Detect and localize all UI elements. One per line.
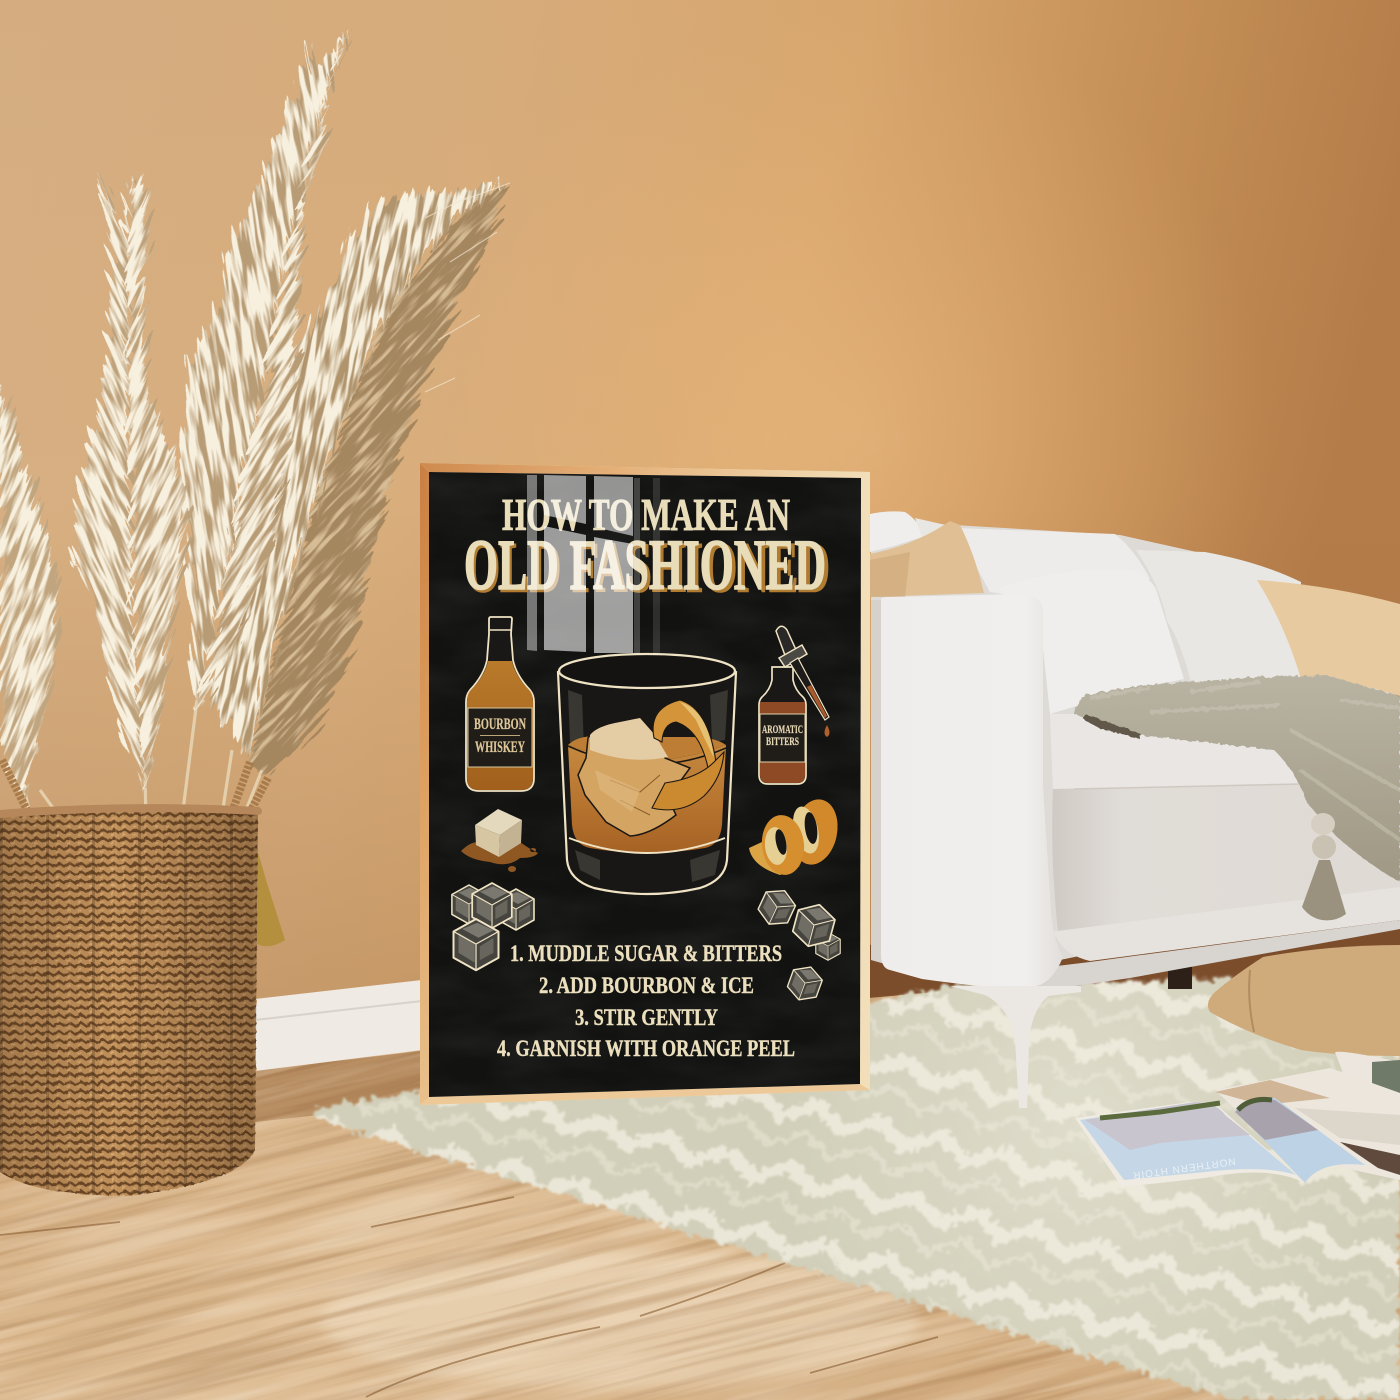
magazine [1075, 1052, 1400, 1187]
sugar cube [461, 809, 538, 872]
label text: BOURBON [474, 716, 526, 733]
whiskey liquid [568, 745, 726, 853]
plume tallest left side [63, 1, 467, 741]
black board [429, 472, 861, 1097]
plume right fringe [425, 183, 510, 392]
back cushion large [998, 570, 1184, 714]
window reflection [527, 475, 660, 655]
wall [0, 0, 1400, 1120]
big ice cube [578, 718, 690, 836]
title [464, 490, 830, 608]
left arm side [871, 600, 885, 964]
throw tassel [1302, 813, 1346, 920]
ice cubes left [452, 883, 534, 970]
baseboard [255, 980, 422, 1071]
step two: 2. ADD BOURBON & ICE [539, 973, 754, 998]
basket handles [2, 760, 268, 816]
beige pillow left [870, 521, 984, 597]
bitters bottle: BITTERS [766, 734, 799, 748]
knit throw [1074, 675, 1400, 882]
plume second left side [0, 146, 376, 821]
title line two shadow: OLD FASHIONED [466, 528, 830, 608]
magazine cover text: NORTHERN HTOIR [1131, 1155, 1236, 1180]
floor pillow [1208, 945, 1400, 1056]
plume tallest right side [0, 0, 656, 781]
chalk smudges [429, 472, 861, 1097]
glass base line [569, 838, 725, 853]
old fashioned glass [558, 654, 736, 894]
seat cushion front [1052, 784, 1400, 932]
step four: 4. GARNISH WITH ORANGE PEEL [497, 1036, 795, 1061]
title line one: HOW TO MAKE AN [502, 490, 790, 540]
left page cover [1075, 1102, 1305, 1187]
bitters bottle [759, 626, 830, 784]
recipe steps [497, 941, 795, 1061]
right pages [1215, 1068, 1400, 1180]
orange twist [749, 795, 843, 877]
title line two: OLD FASHIONED [464, 525, 826, 605]
seat cushion top [1050, 714, 1400, 860]
poster [420, 463, 870, 1105]
ice cubes right [754, 884, 840, 1005]
sofa body underlay [871, 520, 1400, 960]
pampas grass [0, 0, 806, 907]
whiskey bottle: WHISKEY [475, 739, 525, 756]
back cushion middle top [955, 528, 1150, 600]
back cushion right [1136, 550, 1301, 682]
dropper [776, 626, 830, 737]
plume second right side [0, 149, 418, 816]
rug [313, 970, 1400, 1400]
beige pillow right [1257, 580, 1400, 696]
sofa base rail [1050, 887, 1400, 961]
smoky glass shading [568, 690, 728, 882]
wood floor [0, 984, 1400, 1400]
step one: 1. MUDDLE SUGAR & BITTERS [510, 941, 782, 966]
back cushion left [870, 511, 925, 552]
bottle label [468, 708, 532, 767]
dark floor behind rug under sofa [868, 905, 1400, 998]
woven basket [0, 760, 285, 1196]
stems [22, 700, 262, 826]
right spread photo [1235, 1097, 1365, 1183]
wooden frame [420, 463, 870, 1105]
orange peel in glass [652, 700, 724, 810]
basket tassel [257, 852, 285, 946]
plume far left [0, 362, 202, 820]
bitters bottle: AROMATIC [762, 722, 803, 736]
rolled magazine [1335, 1052, 1400, 1095]
leg [950, 986, 1081, 1108]
arm [881, 594, 1063, 988]
whiskey bottle [466, 617, 534, 791]
rim [559, 654, 735, 688]
plume lower right shadow side [0, 54, 806, 907]
plume right upper side [93, 122, 627, 821]
sofa [870, 511, 1400, 1108]
step three: 3. STIR GENTLY [575, 1005, 718, 1030]
bitters puddle [461, 842, 538, 872]
sofa dark leg [1168, 965, 1192, 989]
